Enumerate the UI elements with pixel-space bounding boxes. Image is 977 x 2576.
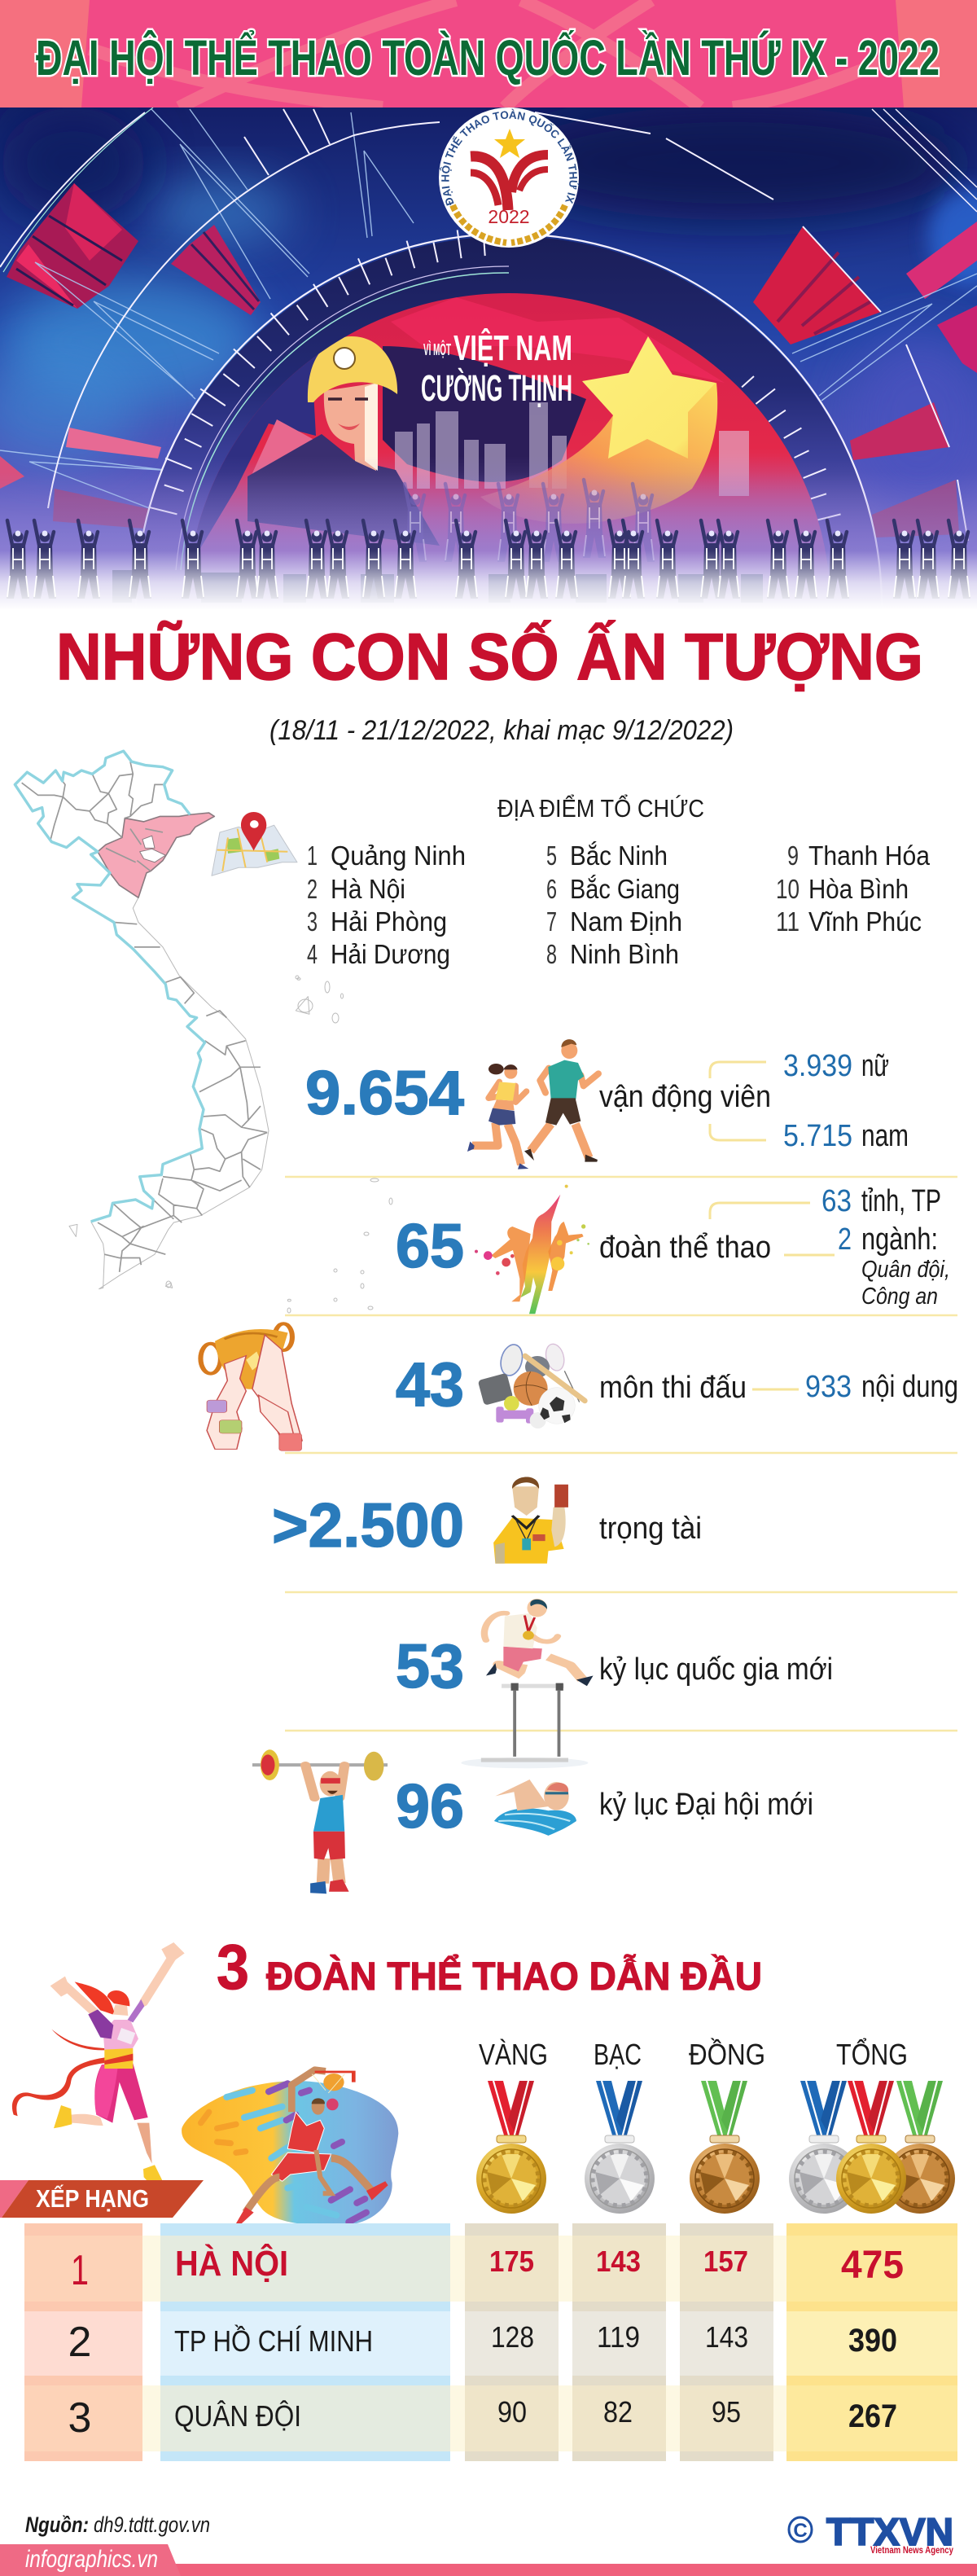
label: kỷ lục Đại hội mới [599, 1788, 813, 1822]
dates: (18/11 - 21/12/2022, khai mạc 9/12/2022) [269, 715, 734, 746]
results table [24, 2223, 957, 2461]
icon: sports equipment [478, 1342, 585, 1428]
copyright mark [789, 2517, 812, 2542]
row 3: 90 [497, 2395, 527, 2429]
slogan: VIỆT NAM [453, 327, 572, 368]
row 2: 2 [68, 2319, 91, 2366]
islands [69, 978, 309, 1301]
venues list: 8 [546, 939, 557, 969]
western border [15, 751, 205, 1222]
event logo [439, 108, 580, 248]
bronze column [680, 2223, 773, 2461]
icon: hurdler [461, 1599, 594, 1768]
venues list: Thanh Hóa [808, 840, 931, 871]
venues list: Hòa Bình [808, 874, 909, 904]
logo star [494, 129, 525, 158]
copyright mark: C [793, 2520, 808, 2542]
row 1: 143 [596, 2245, 641, 2278]
medal: bronze [690, 2081, 760, 2214]
row 3: 95 [712, 2395, 741, 2429]
map icon with pin [212, 812, 297, 875]
agency name: TTXVN [826, 2510, 953, 2553]
venues list: 5 [546, 840, 557, 871]
row 3: 3 [68, 2394, 91, 2442]
website: infographics.vn [25, 2546, 158, 2573]
star [582, 336, 716, 459]
rank column [24, 2223, 142, 2461]
footer bar [0, 2544, 977, 2576]
column headers: BẠC [594, 2038, 642, 2071]
slogan: VÌ MỘT [423, 340, 451, 359]
section heading: top 3 [217, 1931, 762, 2003]
venues list: 2 [307, 874, 318, 904]
header band [0, 0, 977, 108]
row 1: 175 [489, 2245, 534, 2278]
venues list: 3 [307, 906, 318, 937]
stat: delegations: tỉnh, TP [861, 1184, 941, 1218]
gold column [465, 2223, 559, 2461]
referees number: >2.500 [272, 1491, 464, 1560]
venues list: Hải Dương [331, 939, 450, 969]
label: trọng tài [599, 1512, 702, 1546]
venues list: Vĩnh Phúc [808, 906, 922, 937]
column headers [479, 2036, 908, 2071]
row 1: 157 [703, 2245, 748, 2278]
silver column [572, 2223, 666, 2461]
venues heading: ĐỊA ĐIỂM TỔ CHỨC [497, 793, 704, 823]
venues list: 4 [307, 939, 318, 969]
stat: games records [396, 1772, 813, 1841]
medal: silver [585, 2081, 655, 2214]
stage blocks [112, 570, 763, 603]
stat: athletes: nam [861, 1119, 909, 1153]
row 1 [71, 2242, 904, 2294]
back row performers [404, 480, 655, 562]
national records number: 53 [396, 1632, 464, 1701]
row 3 [68, 2394, 897, 2442]
venues list: 11 [776, 906, 800, 937]
venues list: Hà Nội [331, 874, 405, 904]
section heading: top 3: 3 [217, 1931, 249, 2003]
source: Nguồn: [25, 2512, 89, 2537]
stat: sports [396, 1342, 958, 1428]
venues list: Bắc Giang [570, 874, 680, 904]
golden trail [480, 383, 717, 524]
logo laurels [453, 205, 565, 243]
stage scene inside arch [194, 293, 827, 564]
red light panels [0, 183, 977, 538]
agency logo [789, 2510, 953, 2556]
icon: basketball player on color blob [182, 2070, 398, 2226]
icon: swimmer [494, 1780, 576, 1836]
provinces count: 63 [821, 1184, 852, 1218]
venues list: Hải Phòng [331, 906, 447, 937]
icon: runners [467, 1039, 598, 1170]
icon: colorful athletes [475, 1185, 589, 1314]
label: vận động viên [599, 1080, 771, 1114]
row 3: 267 [848, 2398, 897, 2434]
logo ring text: ĐẠI HỘI THỂ THAO TOÀN QUỐC LẦN THỨ IX [440, 109, 580, 206]
logo emblem [471, 155, 548, 210]
sectors names: Quân đội, [861, 1257, 950, 1283]
venues list: 1 [307, 840, 318, 871]
venues list: Quảng Ninh [331, 840, 466, 871]
arch outline and ticks [136, 230, 882, 607]
column headers: ĐỒNG [689, 2037, 765, 2071]
label: đoàn thể thao [599, 1231, 771, 1265]
hero: stage photo [0, 106, 977, 611]
soft lavender floor [0, 483, 977, 602]
total column [786, 2223, 957, 2461]
stat: delegations [396, 1184, 950, 1314]
row 2: 119 [597, 2320, 640, 2354]
brackets [710, 1062, 766, 1140]
men: 5.715 [783, 1119, 852, 1153]
venues list: 9 [787, 840, 799, 871]
row 1: 1 [71, 2247, 89, 2294]
province borders [22, 761, 267, 1272]
row 2 [68, 2319, 897, 2366]
host provinces [98, 813, 214, 897]
venues list: 6 [546, 874, 557, 904]
rank banner: XẾP HẠNG [36, 2184, 149, 2213]
logo year: 2022 [488, 206, 530, 227]
arch band [145, 238, 870, 529]
stat: athletes: nữ [861, 1049, 889, 1083]
row 2: TP HỒ CHÍ MINH [174, 2324, 373, 2358]
row 2: 143 [705, 2320, 748, 2354]
venues list: 7 [546, 906, 557, 937]
row 1: HÀ NỘI [175, 2242, 288, 2284]
team column [160, 2223, 450, 2461]
section title: NHỮNG CON SỐ ẤN TƯỢNG [56, 620, 923, 694]
medal: gold [476, 2081, 546, 2214]
row 2: 390 [848, 2323, 897, 2359]
delegations number: 65 [396, 1212, 464, 1281]
label: kỷ lục quốc gia mới [599, 1652, 833, 1687]
stat: delegations: ngành: [861, 1222, 938, 1257]
women: 3.939 [783, 1049, 852, 1083]
games records number: 96 [396, 1772, 464, 1841]
column headers: VÀNG [479, 2038, 548, 2071]
stat: sports: nội dung [861, 1370, 958, 1404]
stat: national records [396, 1599, 833, 1768]
miner woman [248, 336, 440, 546]
sports number: 43 [396, 1350, 464, 1420]
icon: referee [493, 1477, 568, 1564]
venues list: Nam Định [570, 906, 682, 937]
source [25, 2512, 210, 2537]
events count: 933 [805, 1370, 852, 1404]
stat: referees [272, 1477, 702, 1564]
row 3: QUÂN ĐỘI [174, 2399, 301, 2433]
venues list: 10 [776, 874, 800, 904]
icon: hands holding trophy [200, 1323, 302, 1450]
agency subtitle: Vietnam News Agency [870, 2544, 953, 2556]
stat: delegations: Công an [861, 1284, 938, 1310]
sectors count: 2 [838, 1222, 852, 1257]
venues list [307, 793, 931, 969]
connectors [710, 1203, 835, 1255]
map of Vietnam [15, 751, 309, 1301]
source: dh9.tdtt.gov.vn [94, 2512, 210, 2537]
stat: athletes [305, 1039, 909, 1170]
row 3: 82 [603, 2395, 633, 2429]
column headers: TỔNG [836, 2036, 908, 2071]
slogan: CƯỜNG THỊNH [421, 367, 572, 409]
stage arcs [0, 108, 977, 541]
venues list: Ninh Bình [570, 939, 679, 969]
laser lines [0, 109, 977, 511]
performers row [7, 520, 970, 599]
icon: weightlifter [252, 1749, 388, 1894]
athletes number: 9.654 [305, 1059, 464, 1128]
icon: finish-line runner [12, 1942, 185, 2191]
row 2: 128 [491, 2320, 534, 2354]
rank banner [0, 2180, 204, 2218]
country fill [91, 897, 269, 1289]
medals: total [789, 2081, 955, 2214]
city skyline [395, 402, 749, 496]
venues list: Bắc Ninh [570, 840, 668, 871]
section heading: top 3: ĐOÀN THỂ THAO DẪN ĐẦU [266, 1955, 762, 1999]
label: môn thi đấu [599, 1371, 747, 1405]
row 1: 475 [841, 2244, 904, 2287]
slogan [421, 327, 572, 409]
more islands [166, 976, 392, 1313]
